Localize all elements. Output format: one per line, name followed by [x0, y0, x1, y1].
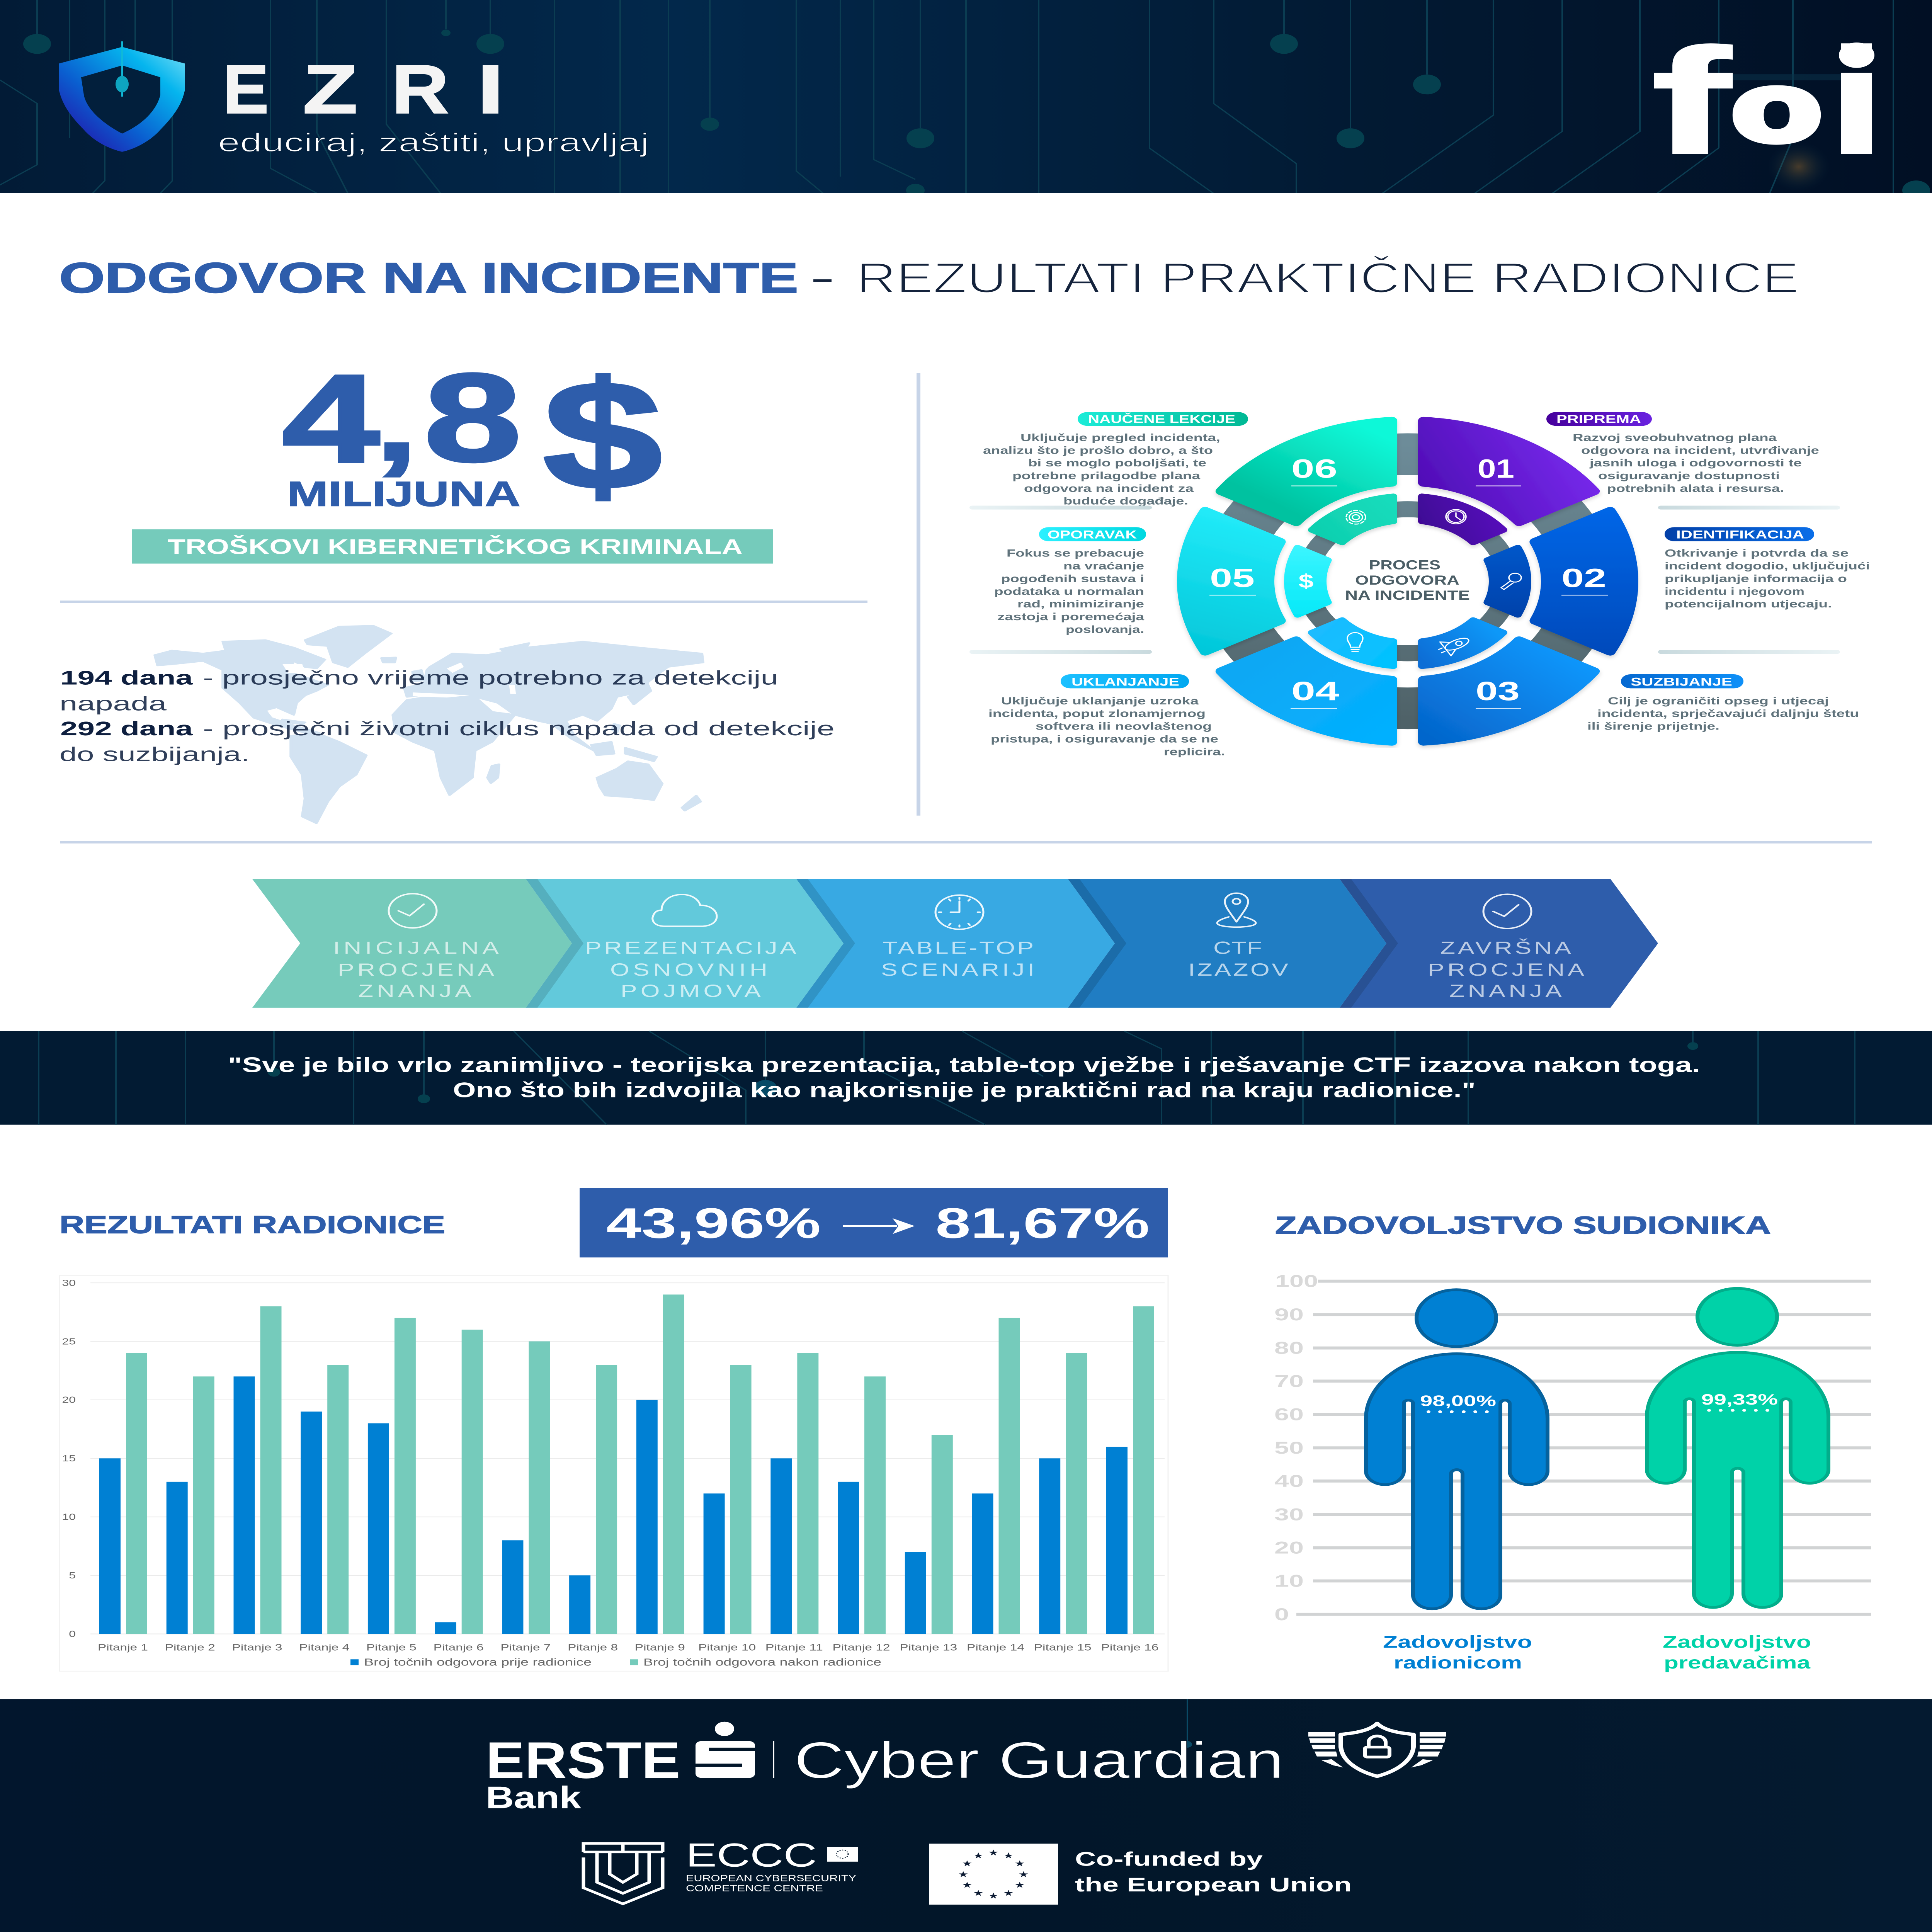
scale labels — [1274, 1272, 1318, 1624]
callout: identifikacija: potencijalnom utjecaju. — [1665, 598, 1832, 610]
center label: PROCES — [1369, 557, 1440, 572]
icon: EU flag: ★ — [1003, 1851, 1014, 1861]
callout: uklanjanje: incidenta, poput zlonamjernog — [988, 707, 1206, 719]
segment numbers: 04 — [1291, 676, 1339, 706]
callout: identifikacija: IDENTIFIKACIJA — [1676, 528, 1804, 541]
callout: oporavak: pogođenih sustava i — [1001, 573, 1144, 584]
icon: EU flag — [929, 1844, 1058, 1905]
segment numbers: 05 — [1210, 563, 1255, 593]
big number: 8 — [424, 347, 522, 488]
callout: priprema — [1546, 412, 1819, 494]
callout: identifikacija — [1665, 527, 1870, 610]
figure: lecturer satisfaction: 99,33% — [1701, 1391, 1778, 1408]
callout: oporavak: poslovanja. — [1066, 623, 1144, 635]
arrow — [843, 1218, 915, 1234]
callout: naučene lekcije: NAUČENE LEKCIJE — [1088, 413, 1235, 425]
step 2: prezentacija osnovnih pojmova: OSNOVNIH — [610, 960, 767, 980]
step 3: table-top scenariji: TABLE-TOP — [883, 938, 1034, 957]
logo: foi: i — [1827, 17, 1886, 185]
segment 05: oporavak — [1120, 495, 1354, 652]
label: workshop: Zadovoljstvo — [1383, 1633, 1532, 1651]
bars: after workshop — [126, 1294, 1154, 1634]
logo: foi: o — [1732, 53, 1821, 161]
label: workshop — [1383, 1633, 1532, 1672]
segment numbers: 06 — [1291, 454, 1337, 483]
logo: foi: f — [1651, 17, 1734, 185]
callout: suzbijanje: incidenta, sprječavajući daljnju štetu — [1597, 707, 1859, 719]
title — [59, 254, 1799, 302]
scale labels: 50 — [1274, 1439, 1304, 1458]
step 4: CTF izazov: IZAZOV — [1188, 960, 1288, 980]
callout: suzbijanje — [1587, 674, 1859, 732]
logo: EZRI wordmark: Z — [303, 51, 357, 128]
icon: gear — [1346, 510, 1366, 524]
icon: rocket — [1435, 633, 1474, 658]
title: REZULTATI PRAKTIČNE RADIONICE — [856, 254, 1799, 302]
center label: ODGOVORA — [1355, 573, 1459, 587]
callout: priprema: odgovora na incident, utvrđivanje — [1581, 444, 1819, 456]
y axis labels: 20 — [62, 1395, 76, 1405]
icon: EU flag: ★ — [973, 1889, 983, 1898]
callout: score improvement — [580, 1188, 1168, 1257]
y axis labels: 15 — [62, 1454, 76, 1463]
step 5: završna procjena znanja: ZAVRŠNA — [1440, 938, 1571, 957]
callout: priprema: potrebnih alata i resursa. — [1607, 482, 1784, 494]
callout: uklanjanje: softvera ili neovlaštenog — [1036, 720, 1212, 732]
icon: Cyber Guardian shield — [1308, 1723, 1446, 1776]
title: ODGOVOR NA INCIDENTE — [59, 254, 798, 302]
x axis labels: Pitanje 3 — [232, 1642, 282, 1653]
callout: naučene lekcije — [983, 412, 1248, 507]
callout: oporavak — [994, 527, 1146, 635]
x axis labels: Pitanje 10 — [698, 1642, 756, 1653]
chart: correct answers per question — [60, 1276, 1168, 1671]
logo: EZRI shield — [59, 41, 185, 152]
callout: uklanjanje: Uključuje uklanjanje uzroka — [1001, 695, 1199, 707]
logo: ECCC: EUROPEAN CYBERSECURITY — [686, 1873, 856, 1883]
panel: workshop steps — [252, 879, 1658, 1008]
text block: co-funded: the European Union — [1075, 1874, 1352, 1896]
center label: NA INCIDENTE — [1345, 588, 1470, 603]
scale labels: 60 — [1274, 1405, 1304, 1424]
tagline: educiraj, zaštiti, upravljaj — [218, 128, 649, 157]
logo: ECCC — [583, 1837, 858, 1904]
callout: identifikacija: incident dogodio, uključujući — [1665, 560, 1870, 571]
scale labels: 90 — [1274, 1305, 1304, 1324]
bars: before workshop — [99, 1376, 1128, 1634]
segment 06: naučene lekcije — [1221, 386, 1429, 553]
quote — [228, 1053, 1700, 1102]
x axis labels: Pitanje 14 — [967, 1642, 1024, 1653]
x axis labels: Pitanje 8 — [568, 1642, 618, 1653]
icon: EU flag: ★ — [988, 1848, 998, 1858]
world map — [155, 626, 703, 823]
scale labels: 80 — [1274, 1338, 1304, 1357]
x axis labels: Pitanje 9 — [635, 1642, 685, 1653]
callout: naučene lekcije: potrebne prilagodbe plana — [1012, 469, 1201, 481]
scale labels: 100 — [1275, 1272, 1318, 1291]
label: lecturers: Zadovoljstvo — [1663, 1633, 1811, 1651]
x axis labels: Pitanje 15 — [1034, 1642, 1092, 1653]
connector rings — [1230, 454, 1586, 708]
icon: EU flag: ★ — [962, 1881, 972, 1890]
x axis labels — [98, 1642, 1158, 1653]
callout: uklanjanje — [988, 674, 1225, 757]
scale labels: 0 — [1274, 1605, 1289, 1624]
icon: bulb — [1347, 633, 1363, 651]
logo: Erste Bank — [486, 1722, 774, 1815]
callout: priprema: PRIPREMA — [1556, 413, 1641, 425]
callout: suzbijanje: ili širenje prijetnje. — [1587, 720, 1719, 732]
callout: naučene lekcije: analizu što je prošlo dobro, a što — [983, 444, 1213, 456]
scale labels: 70 — [1274, 1372, 1304, 1391]
y axis labels — [62, 1278, 76, 1639]
logo: EZRI wordmark: R — [392, 51, 449, 128]
x axis labels: Pitanje 1 — [98, 1642, 148, 1653]
step 2: prezentacija osnovnih pojmova: POJMOVA — [621, 981, 761, 1001]
figure: lecturer satisfaction — [1647, 1288, 1828, 1607]
step 5: završna procjena znanja: ZNANJA — [1449, 981, 1562, 1001]
step 3: table-top scenariji — [796, 879, 1115, 1008]
chart: participant satisfaction — [1274, 1272, 1871, 1672]
icon: EU flag: ★ — [1015, 1859, 1025, 1869]
y axis labels: 25 — [62, 1337, 76, 1346]
step 1: inicijalna procjena znanja: INICIJALNA — [333, 938, 499, 957]
segment numbers: 02 — [1561, 563, 1606, 593]
callout: oporavak: rad, minimiziranje — [1017, 598, 1144, 610]
icon: EU flag: ★ — [1019, 1870, 1029, 1879]
logo: Erste Bank: Bank — [486, 1780, 581, 1815]
callout: uklanjanje: replicira. — [1164, 746, 1225, 757]
legend: Broj točnih odgovora prije radionice — [364, 1657, 592, 1668]
step 1: inicijalna procjena znanja — [252, 879, 572, 1008]
x axis labels: Pitanje 16 — [1101, 1642, 1158, 1653]
callout: naučene lekcije: buduće događaje. — [1063, 495, 1188, 507]
x axis labels: Pitanje 12 — [832, 1642, 890, 1653]
cost caption box: TROŠKOVI KIBERNETIČKOG KRIMINALA — [168, 535, 743, 558]
x axis labels: Pitanje 5 — [366, 1642, 417, 1653]
logo: Cyber Guardian: Cyber Guardian — [794, 1731, 1284, 1789]
logo: EZRI wordmark: I — [477, 51, 504, 128]
text block: co-funded — [1075, 1848, 1352, 1896]
quote: Ono što bih izdvojila kao najkorisnije je praktični rad na kraju radionice." — [453, 1078, 1476, 1102]
callout: oporavak: podataka u normalan — [994, 585, 1144, 597]
big number: , — [376, 362, 417, 482]
logo: EZRI wordmark — [223, 51, 504, 128]
label: workshop: radionicom — [1394, 1653, 1522, 1672]
icon: EU flag: ★ — [962, 1859, 972, 1869]
panel: cost statistic — [132, 347, 773, 564]
step 4: CTF izazov — [1068, 879, 1386, 1008]
step 1: inicijalna procjena znanja: PROCJENA — [338, 960, 494, 980]
y axis labels: 0 — [69, 1629, 76, 1639]
heading: zadovoljstvo sudionika: ZADOVOLJSTVO SUDIONIKA — [1275, 1211, 1771, 1239]
dollar sign: $ — [543, 349, 662, 521]
icon: clock — [1446, 510, 1466, 524]
x axis labels: Pitanje 13 — [900, 1642, 957, 1653]
icon: EU flag: ★ — [958, 1870, 968, 1879]
callout: suzbijanje: Cilj je ograničiti opseg i utjecaj — [1608, 695, 1829, 707]
text block: detection statistics — [60, 667, 835, 765]
logo: Erste Bank: ERSTE — [486, 1731, 680, 1789]
scale labels: 20 — [1274, 1538, 1304, 1558]
unit label: MILIJUNA — [287, 474, 520, 514]
callout: priprema: jasnih uloga i odgovornosti te — [1589, 457, 1802, 469]
segment numbers — [1209, 454, 1608, 709]
x axis labels: Pitanje 4 — [299, 1642, 349, 1653]
figure: workshop satisfaction — [1366, 1290, 1548, 1609]
text block: co-funded: Co-funded by — [1075, 1848, 1263, 1870]
icon: EU flag: ★ — [973, 1851, 983, 1861]
y axis labels: 30 — [62, 1278, 76, 1288]
callout: identifikacija: Otkrivanje i potvrda da se — [1665, 547, 1849, 559]
callout: oporavak: na vraćanje — [1063, 560, 1144, 571]
callout: identifikacija: prikupljanje informacija o — [1665, 573, 1847, 584]
step 4: CTF izazov: CTF — [1213, 938, 1262, 957]
text block: detection statistics: 292 dana — [60, 718, 194, 740]
segment 01: priprema — [1422, 421, 1594, 543]
callout: uklanjanje: UKLANJANJE — [1071, 675, 1179, 688]
step 3: table-top scenariji: SCENARIJI — [881, 960, 1034, 980]
logo: ECCC: COMPETENCE CENTRE — [686, 1883, 823, 1893]
icon: EU flag: ★ — [988, 1891, 998, 1901]
logo: ECCC: ECCC — [686, 1837, 817, 1874]
panel: footer band — [0, 1699, 1932, 1932]
callout: score improvement: 43,96% — [606, 1199, 821, 1247]
label: lecturers — [1663, 1633, 1811, 1672]
segment numbers: 03 — [1476, 676, 1520, 706]
callout: oporavak: OPORAVAK — [1048, 528, 1137, 541]
segment 02: identifikacija — [1462, 511, 1696, 667]
callout: suzbijanje: SUZBIJANJE — [1631, 675, 1732, 688]
callout: oporavak: Fokus se prebacuje — [1007, 547, 1144, 559]
panel: header band — [0, 0, 1932, 201]
text block: detection statistics: do suzbijanja. — [60, 743, 250, 765]
callout: score improvement: 81,67% — [935, 1199, 1150, 1247]
icon: magnifier — [1501, 573, 1521, 590]
scale labels: 30 — [1274, 1505, 1304, 1524]
callout: priprema: Razvoj sveobuhvatnog plana — [1573, 432, 1777, 443]
x axis labels: Pitanje 11 — [765, 1642, 823, 1653]
x axis labels: Pitanje 2 — [165, 1642, 215, 1653]
x axis labels: Pitanje 6 — [434, 1642, 484, 1653]
icon: EU flag: ★ — [1003, 1889, 1014, 1898]
callout: naučene lekcije: Uključuje pregled incidenta, — [1020, 432, 1220, 443]
callout: naučene lekcije: bi se moglo poboljšati, te — [1028, 457, 1206, 469]
scale labels: 10 — [1274, 1571, 1304, 1590]
logo: foi — [1651, 17, 1886, 185]
quote: "Sve je bilo vrlo zanimljivo - teorijska prezentacija, table-top vježbe i rješavanje CTF izazova nakon toga. — [228, 1053, 1700, 1077]
step 2: prezentacija osnovnih pojmova: PREZENTACIJA — [585, 938, 796, 957]
segment 04: uklanjanje — [1221, 620, 1393, 742]
logo: EZRI wordmark: E — [223, 51, 269, 128]
segment numbers: 01 — [1478, 454, 1514, 483]
scale labels: 40 — [1274, 1471, 1304, 1491]
step 5: završna procjena znanja — [1340, 879, 1658, 1008]
step 1: inicijalna procjena znanja: ZNANJA — [358, 981, 471, 1001]
big number: 4 — [282, 349, 381, 489]
text block: detection statistics: 194 dana — [60, 667, 194, 689]
icon: dollar: $ — [1299, 570, 1313, 592]
text block: detection statistics: napada — [60, 693, 167, 715]
big number — [282, 347, 522, 489]
callout: oporavak: zastoja i poremećaja — [997, 611, 1145, 622]
chart: process wheel — [1120, 386, 1696, 777]
text block: detection statistics: - prosječni životni ciklus napada od detekcije — [203, 718, 835, 740]
legend: Broj točnih odgovora nakon radionice — [643, 1657, 881, 1668]
callout: uklanjanje: pristupa, i osiguravanje da se ne — [991, 733, 1218, 745]
panel: quote band — [0, 1031, 1932, 1125]
y axis labels: 10 — [62, 1512, 76, 1522]
callout: identifikacija: incidentu i njegovom — [1665, 585, 1804, 597]
segment 03: suzbijanje — [1386, 609, 1594, 777]
callout: naučene lekcije: odgovora na incident za — [1024, 482, 1194, 494]
x axis labels: Pitanje 7 — [500, 1642, 551, 1653]
label: lecturers: predavačima — [1664, 1653, 1811, 1672]
icon: EU flag: ★ — [1015, 1881, 1025, 1890]
legend — [350, 1657, 881, 1668]
center label — [1345, 557, 1470, 603]
y axis labels: 5 — [69, 1570, 76, 1580]
step 2: prezentacija osnovnih pojmova — [526, 879, 844, 1008]
heading: rezultati radionice: REZULTATI RADIONICE — [60, 1211, 445, 1238]
callout: priprema: osiguravanje dostupnosti — [1598, 469, 1780, 481]
step 5: završna procjena znanja: PROCJENA — [1428, 960, 1584, 980]
text block: detection statistics: - prosječno vrijeme potrebno za detekciju — [203, 667, 778, 689]
figure: workshop satisfaction: 98,00% — [1420, 1393, 1496, 1410]
cost caption box — [132, 529, 773, 564]
